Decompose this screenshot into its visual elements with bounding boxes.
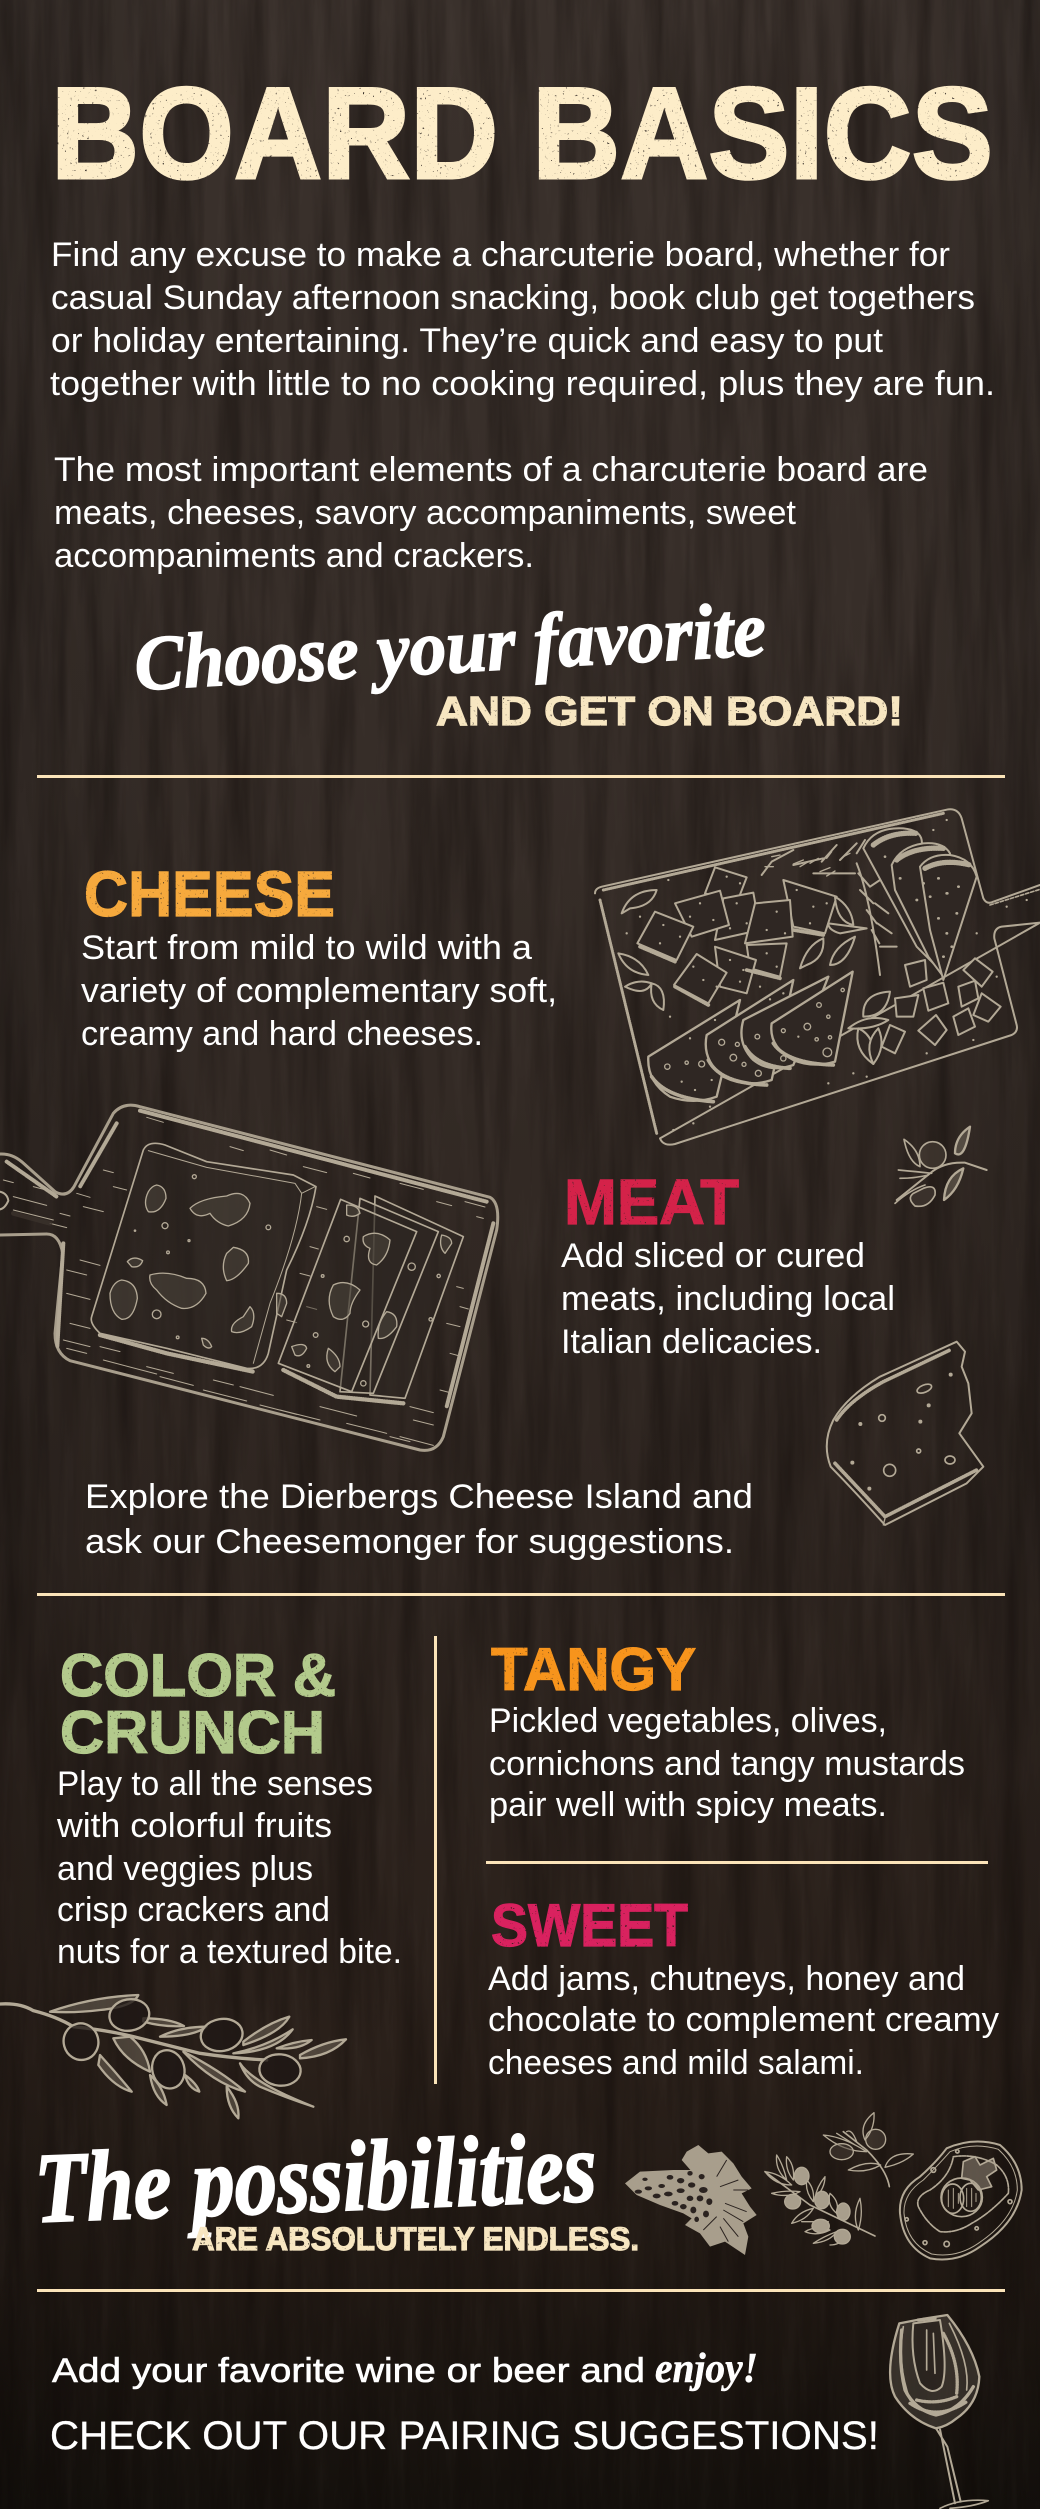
intro paragraph 2 (54, 451, 928, 575)
color and crunch heading and text (56, 1642, 402, 1971)
illustration: olive branch (0, 1995, 346, 2118)
color and crunch heading and text: and veggies plus (57, 1850, 313, 1888)
intro paragraph 1 (50, 236, 995, 403)
script heading: choose your favorite: Choose your favorite (132, 585, 768, 707)
closing line: add wine or beer and enjoy (52, 2346, 758, 2392)
meat heading and text (561, 1166, 895, 1361)
intro paragraph 2: accompaniments and crackers. (54, 537, 534, 575)
sweet heading and text: cheeses and mild salami. (488, 2044, 864, 2082)
cheese heading and text: CHEESE (84, 858, 335, 930)
icon: small olive sprig (895, 1127, 987, 1206)
color and crunch heading and text: COLOR & (60, 1642, 336, 1709)
tangy heading and text: pair well with spicy meats. (489, 1786, 887, 1824)
explore text (85, 1478, 753, 1561)
color and crunch heading and text: crisp crackers and (57, 1891, 330, 1929)
call to action: CHECK OUT OUR PAIRING SUGGESTIONS! (50, 2414, 879, 2458)
cheese heading and text: Start from mild to wild with a (81, 929, 532, 967)
title: BOARD BASICS (51, 60, 993, 206)
intro paragraph 1: together with little to no cooking required, plus they are fun. (50, 365, 995, 403)
subheading: are absolutely endless: ARE ABSOLUTELY ENDLESS. (192, 2221, 639, 2257)
script heading: the possibilities: The possibilities (33, 2111, 598, 2244)
color and crunch heading and text: with colorful fruits (56, 1807, 332, 1845)
intro paragraph 2: meats, cheeses, savory accompaniments, sweet (54, 494, 797, 532)
explore text: ask our Cheesemonger for suggestions. (85, 1523, 734, 1561)
sweet heading and text: SWEET (491, 1892, 688, 1959)
color and crunch heading and text: Play to all the senses (57, 1765, 373, 1803)
icon: bruschetta toast (900, 2142, 1022, 2259)
meat heading and text: Italian delicacies. (561, 1323, 822, 1361)
illustration: cheese slices board (0, 1105, 498, 1450)
sweet heading and text: Add jams, chutneys, honey and (488, 1960, 965, 1998)
cheese heading and text: creamy and hard cheeses. (81, 1015, 483, 1053)
icon: olive sprigs (765, 2113, 913, 2245)
intro paragraph 1: casual Sunday afternoon snacking, book club get togethers (51, 279, 975, 317)
meat heading and text: meats, including local (561, 1280, 895, 1318)
tangy heading and text: Pickled vegetables, olives, (489, 1702, 887, 1740)
icon: wine glass (890, 2315, 988, 2508)
color and crunch heading and text: nuts for a textured bite. (57, 1933, 402, 1971)
tangy heading and text (489, 1636, 965, 1824)
cheese heading and text (81, 858, 557, 1053)
icon: grapes and vine leaf (625, 2145, 757, 2255)
sweet heading and text: chocolate to complement creamy (488, 2001, 999, 2039)
explore text: Explore the Dierbergs Cheese Island and (85, 1478, 753, 1516)
meat heading and text: Add sliced or cured (561, 1237, 865, 1275)
intro paragraph 1: Find any excuse to make a charcuterie board, whether for (51, 236, 950, 274)
tangy heading and text: TANGY (491, 1636, 696, 1703)
cheese heading and text: variety of complementary soft, (81, 972, 557, 1010)
illustration: cheese and cracker board (595, 809, 1040, 1145)
intro paragraph 2: The most important elements of a charcuterie board are (54, 451, 928, 489)
intro paragraph 1: or holiday entertaining. They’re quick and easy to put (51, 322, 884, 360)
subheading: and get on board: AND GET ON BOARD! (436, 688, 903, 734)
closing line: add wine or beer and enjoy: enjoy! (655, 2346, 758, 2392)
icon: cheese chunk (827, 1342, 983, 1525)
color and crunch heading and text: CRUNCH (60, 1699, 325, 1766)
tangy heading and text: cornichons and tangy mustards (489, 1745, 965, 1783)
closing line: add wine or beer and enjoy: Add your favorite wine or beer and (52, 2352, 645, 2390)
sweet heading and text (488, 1892, 999, 2082)
meat heading and text: MEAT (564, 1166, 739, 1238)
